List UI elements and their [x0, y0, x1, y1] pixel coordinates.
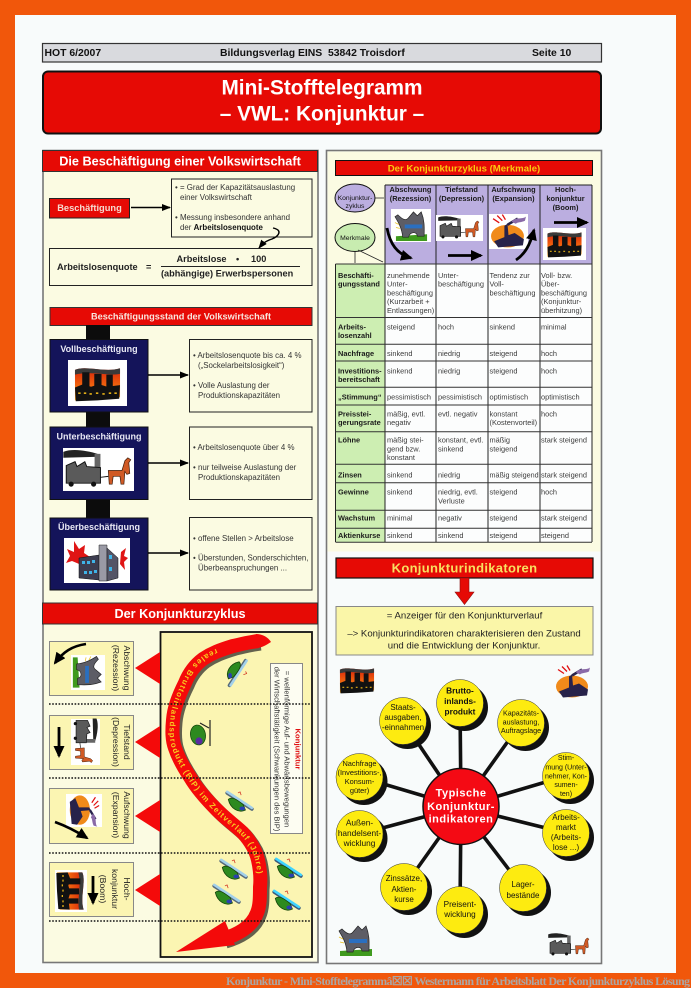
arrow: Aufschwung [516, 230, 534, 260]
label box: Beschäftigung [50, 198, 130, 218]
definition box [172, 179, 312, 237]
row: Zinsen [338, 470, 587, 479]
row: Beschäftigungsstand: gungsstand [338, 280, 380, 289]
title: – VWL: Konjunktur – [220, 102, 424, 126]
node: Kapazitätsauslastung: auslastung, [503, 718, 539, 726]
row: Stimmung [338, 392, 580, 401]
row: Löhne: stark steigend [541, 436, 587, 445]
icon: factory with donkey [74, 718, 98, 763]
card: Hochkonjunktur: (Boom) [98, 875, 108, 903]
row: Löhne: steigend [490, 444, 517, 453]
row: Wachstum [338, 514, 587, 523]
row: Stimmung: optimistisch [490, 392, 528, 401]
row: Nachfrage: niedrig [438, 349, 460, 358]
node: Nachfrage: (Investitions-, [338, 768, 381, 777]
row: Investitionsbereitschaft: hoch [541, 366, 557, 375]
table: Merkmale: Abschwung [390, 185, 432, 194]
row: Preissteigerungsrate [338, 410, 557, 427]
table: Merkmale: Hoch- [555, 185, 576, 194]
table header [385, 185, 592, 264]
block: Unterbeschäftigung: Unterbeschäftigung [56, 432, 142, 442]
node: Zinssätze: Aktien- [392, 885, 417, 894]
row: Wachstum: stark steigend [541, 514, 587, 523]
node: Arbeitsmarkt: Arbeits- [552, 813, 580, 822]
row: Zinsen: mäßig steigend [490, 470, 539, 479]
node: Zinssätze: kurse [394, 895, 414, 904]
definition box: indicators: –> Konjunkturindikatoren charakterisieren den Zustand [347, 628, 581, 640]
formula box: (abhängige) Erwerbspersonen [161, 268, 294, 278]
curve: real GDP [172, 641, 260, 939]
definition box: • = Grad der Kapazitätsauslastung [175, 183, 295, 192]
row: Löhne [338, 436, 587, 462]
row: Investitionsbereitschaft: bereitschaft [338, 375, 380, 384]
row: Preissteigerungsrate: (Kostenvorteil) [490, 418, 537, 427]
row: Beschäftigungsstand: beschäftigung [490, 288, 536, 297]
block: Vollbeschäftigung [50, 340, 148, 412]
curve shadow [175, 644, 263, 942]
heading: Der Konjunkturzyklus: Der Konjunkturzyklus [114, 607, 246, 621]
node: Arbeitsmarkt: (Arbeits- [551, 833, 581, 842]
block: Überbeschäftigung [50, 518, 148, 590]
arrow: peak [92, 876, 94, 903]
icon: boom factory small [340, 668, 374, 693]
icon: Aufschwung factory [489, 214, 528, 249]
row: Beschäftigungsstand: zunehmende [387, 271, 430, 280]
text box: Voll: • Arbeitslosenquote bis ca. 4 % [193, 351, 301, 360]
row: Stimmung: pessimistisch [387, 392, 431, 401]
row: Löhne: sinkend [438, 444, 463, 453]
heading: Beschäftigung: Die Beschäftigung einer Volkswirtschaft [59, 154, 302, 168]
helicopter [189, 720, 210, 746]
text box: Voll: („Sockelarbeitslosigkeit“) [198, 361, 285, 370]
row: Beschäftigungsstand: Tendenz zur [490, 271, 530, 280]
icon: declining factory bottom [339, 926, 372, 956]
node: Stimmung: sumen- [554, 782, 578, 789]
row: Beschäftigungsstand: Voll- [490, 280, 504, 289]
node: Lagerbestände: Lager- [511, 880, 535, 889]
node: Außenhandelsentwicklung [336, 810, 388, 862]
icon: rising factory [70, 795, 99, 827]
card: Tiefstand [50, 716, 134, 770]
card: Abschwung: (Rezession) [111, 645, 121, 691]
row: Arbeitslosenzahl: losenzahl [338, 331, 372, 340]
header bar: HOT 6/2007 [44, 48, 101, 59]
row: Wachstum: negativ [438, 514, 462, 523]
formula box: Arbeitslose [176, 254, 227, 264]
caption banner: Konjunktur - Mini-Stofftelegrammâ☒☒ Westermann für Arbeitsblatt Der Konjunkturzyklus Lösung [226, 974, 690, 988]
hub: Typische Konjunkturindikatoren: Konjunktur- [427, 801, 495, 813]
block: Unterbeschäftigung [50, 427, 148, 500]
icon: boom factory [56, 872, 84, 910]
row: Beschäftigungsstand: beschäftigung [438, 280, 484, 289]
panel: Die Beschäftigung einer Volkswirtschaft [42, 150, 318, 962]
table: Merkmale: Aufschwung [491, 185, 536, 194]
definition box: indicators [336, 606, 593, 655]
row: Beschäftigungsstand: überhitzung) [541, 306, 582, 315]
node: Staatsausgaben: ausgaben, [384, 713, 422, 722]
arrow: rising [55, 822, 87, 838]
node: Arbeitsmarkt: lose ...) [553, 843, 579, 852]
row: Investitionsbereitschaft [338, 366, 557, 384]
heading: Konjunkturindikatoren [336, 558, 593, 578]
row: Beschäftigungsstand: (Konjunktur- [541, 297, 582, 306]
arrow: down-curving [55, 644, 86, 663]
node: Bruttoinlandsprodukt [436, 680, 488, 731]
node: Nachfrage: güter) [350, 786, 369, 795]
row: Aktienkurse [338, 531, 569, 540]
icon: rising factory small [556, 666, 590, 698]
heading: Der Konjunkturzyklus [42, 603, 318, 624]
row: Gewinne: sinkend [387, 488, 412, 497]
card: Aufschwung: (Expansion) [111, 792, 121, 838]
formula box: • [236, 254, 239, 264]
text box: Unter [190, 427, 312, 500]
title: Mini-Stofftelegramm [221, 76, 423, 100]
icon: declining factory [73, 656, 101, 688]
subheading: Beschäftigungsstand [50, 308, 312, 326]
arrow: Über [148, 552, 188, 554]
row: Löhne: mäßig stei- [387, 436, 424, 445]
row: Arbeitslosenzahl: minimal [541, 322, 567, 331]
row: Investitionsbereitschaft: sinkend [387, 366, 412, 375]
node: Stimmung [542, 752, 594, 804]
header bar: Bildungsverlag EINS 53842 Troisdorf [220, 48, 405, 59]
row: Nachfrage: Nachfrage [338, 349, 374, 358]
definition box: der Arbeitslosenquote [180, 223, 263, 232]
hub: Typische Konjunkturindikatoren: Typische [436, 788, 486, 800]
arrow: Tiefstand [448, 254, 481, 257]
node: Außenhandelsentwicklung: wicklung [343, 838, 376, 848]
node: Arbeitsmarkt: markt [556, 823, 577, 832]
row: Wachstum: Wachstum [338, 514, 376, 523]
node: Kapazitätsauslastung [498, 700, 549, 751]
node: Bruttoinlandsprodukt: Brutto- [446, 686, 474, 696]
callout: Konjunktur [270, 664, 302, 834]
row: Arbeitslosenzahl: Arbeits- [338, 322, 366, 331]
row: Gewinne: steigend [490, 488, 517, 497]
row: Beschäftigungsstand [338, 271, 587, 315]
arrow: Hochkonjunktur [554, 221, 587, 224]
row: Gewinne: Gewinne [338, 488, 369, 497]
curve tail [256, 634, 271, 648]
arrowhead [176, 921, 235, 952]
node: Arbeitsmarkt [542, 810, 594, 861]
node: Nachfrage [336, 754, 388, 805]
node: Stimmung: ten) [560, 791, 572, 798]
card: Hochkonjunktur: Hoch- [122, 877, 132, 901]
arrow: Voll [148, 374, 188, 376]
row: Nachfrage [338, 349, 557, 358]
icon: Hochkonjunktur factory [543, 228, 586, 260]
table: Merkmale: konjunktur [546, 194, 585, 203]
subheading: Beschäftigungsstand: Beschäftigungsstand der Volkswirtschaft [91, 312, 271, 322]
oval: Merkmale: Merkmale [340, 235, 370, 242]
text box: Unter: Produktionskapazitäten [198, 473, 280, 482]
formula box: 100 [251, 254, 266, 264]
text box: Über: • offene Stellen > Arbeitslose [193, 534, 294, 543]
row: Nachfrage: steigend [490, 349, 517, 358]
row: Aktienkurse: sinkend [438, 531, 463, 540]
oval: Konjunkturzyklus: zyklus [346, 203, 365, 210]
formula box [50, 248, 312, 286]
header bar [42, 44, 602, 62]
card: Aufschwung: Aufschwung [122, 791, 132, 839]
row: Aktienkurse: steigend [541, 531, 569, 540]
table: Merkmale: (Boom) [553, 203, 579, 212]
row: Gewinne: Verluste [438, 497, 465, 506]
card: Hochkonjunktur [50, 862, 134, 916]
definition box: einer Volkswirtschaft [180, 193, 253, 202]
block: Vollbeschäftigung: Vollbeschäftigung [60, 344, 138, 354]
definition box: indicators: = Anzeiger für den Konjunkturverlauf [387, 610, 543, 622]
node: Kapazitätsauslastung: Auftragslage [501, 726, 541, 735]
formula box: Arbeitslosenquote [57, 262, 138, 272]
oval: Merkmale [335, 224, 375, 252]
row: Wachstum: steigend [490, 514, 517, 523]
header bar: Seite 10 [532, 48, 572, 59]
spokes [360, 703, 566, 910]
row: Preissteigerungsrate: mäßig, evtl. [387, 410, 425, 419]
text box: Unter: • Arbeitslosenquote über 4 % [193, 443, 294, 452]
row: Gewinne: hoch [541, 488, 557, 497]
card: Abschwung [50, 642, 134, 696]
icon: overheated building [66, 541, 128, 581]
dotted phase separators [49, 704, 310, 921]
row: Arbeitslosenzahl: hoch [438, 322, 454, 331]
node: Kapazitätsauslastung: Kapazitäts- [503, 708, 540, 718]
row: Preissteigerungsrate: evtl. negativ [438, 410, 478, 419]
row: Löhne: konstant, evtl. [438, 436, 484, 445]
row: Beschäftigungsstand: beschäftigung [541, 288, 587, 297]
row: Beschäftigungsstand: (Kurzarbeit + [387, 297, 430, 306]
table: Merkmale: Tiefstand [445, 185, 478, 194]
callout: Konjunktur: = wellenförmige Auf- und Abwärtsbewegungen [282, 671, 292, 827]
row: Zinsen: niedrig [438, 470, 460, 479]
node: Lagerbestände [500, 864, 551, 916]
row: Beschäftigungsstand: Über- [541, 280, 560, 289]
row: Preissteigerungsrate: negativ [387, 418, 411, 427]
row: Löhne: gend bzw. [387, 444, 420, 453]
node: Stimmung: nehmer, Kon- [545, 774, 588, 780]
table: Merkmale [336, 185, 592, 542]
pointer triangles [135, 652, 160, 906]
text box: Voll [190, 340, 312, 412]
row: Arbeitslosenzahl: sinkend [490, 322, 515, 331]
node: Nachfrage: Konsum- [345, 777, 375, 786]
node: Außenhandelsentwicklung: handelsent- [338, 828, 381, 838]
row: Arbeitslosenzahl [338, 322, 567, 340]
arrow: Unter [148, 462, 188, 464]
row: Investitionsbereitschaft: niedrig [438, 366, 460, 375]
row: Beschäftigungsstand: Beschäfti- [338, 271, 374, 280]
row: Zinsen: Zinsen [338, 470, 362, 479]
row: Beschäftigungsstand: Entlassungen) [387, 306, 434, 315]
title [43, 72, 601, 134]
node: Zinssätze: Zinssätze, [386, 874, 422, 883]
heading: Konjunkturindikatoren: Konjunkturindikatoren [392, 560, 537, 576]
arrow: to formula [259, 228, 279, 248]
arrow: to definition [131, 206, 170, 208]
table: Merkmale: (Depression) [439, 194, 485, 203]
card: Aufschwung [50, 788, 134, 844]
row: Preissteigerungsrate: hoch [541, 410, 557, 419]
plane 3 [227, 792, 252, 811]
text box: Über: Überbeanspruchungen ... [198, 564, 287, 572]
icon: factory with donkey [63, 450, 131, 487]
row: Nachfrage: hoch [541, 349, 557, 358]
row: Zinsen: stark steigend [541, 470, 587, 479]
text box: Unter: • nur teilweise Auslastung der [193, 463, 297, 472]
row: Beschäftigungsstand: Voll- bzw. [541, 271, 572, 280]
node: Zinssätze [380, 864, 432, 915]
row: Löhne: konstant [387, 453, 415, 462]
plane 6 [214, 885, 239, 904]
chart: Konjunkturzyklus wave [160, 631, 313, 958]
node: Bruttoinlandsprodukt: inlands- [444, 696, 476, 706]
node: Preisentwicklung: Preisent- [444, 900, 477, 909]
row: Aktienkurse: sinkend [387, 531, 412, 540]
oval: Konjunkturzyklus [335, 184, 375, 212]
node: Staatsausgaben: -einnahmen [382, 723, 424, 732]
definition box: indicators: und die Entwicklung der Konjunktur. [388, 640, 540, 652]
node: Lagerbestände: bestände [507, 891, 540, 900]
table: Merkmale: (Expansion) [492, 194, 535, 203]
arrow: red down [455, 578, 474, 604]
icon: Tiefstand factory [436, 215, 483, 241]
row: Preissteigerungsrate: gerungsrate [338, 418, 381, 427]
curve label: reales Bruttoinlandsprodukt (BIP) im Zeitverlauf (Jahre) [168, 649, 263, 874]
row: Beschäftigungsstand: Unter- [438, 271, 459, 280]
icon: factory with donkey bottom [548, 933, 589, 955]
row: Aktienkurse: steigend [490, 531, 517, 540]
arrow: level [58, 727, 60, 756]
card: Tiefstand: Tiefstand [122, 724, 132, 760]
row: Stimmung: pessimistisch [438, 392, 482, 401]
card: Tiefstand: (Depression) [111, 717, 121, 767]
node: Bruttoinlandsprodukt: produkt [445, 706, 476, 716]
plane 1 [227, 661, 247, 685]
row: Stimmung: „Stimmung“ [338, 392, 382, 401]
row: Gewinne: niedrig, evtl. [438, 488, 478, 497]
block: Überbeschäftigung: Überbeschäftigung [58, 522, 140, 532]
callout: Konjunktur: der Wirtschaftstätigkeit (Schwankungen des BIP) [272, 667, 282, 832]
node: Staatsausgaben [380, 698, 431, 749]
node: Preisentwicklung [436, 886, 488, 938]
arrow: Abschwung [387, 228, 411, 258]
heading: Merkmale [336, 160, 592, 176]
label box: Beschäftigung: Beschäftigung [57, 203, 122, 213]
node: Preisentwicklung: wicklung [443, 910, 476, 919]
row: Löhne: mäßig [490, 436, 510, 445]
node: Stimmung: mung (Unter- [545, 764, 587, 772]
row: Beschäftigungsstand: Unter- [387, 280, 408, 289]
row: Stimmung: optimistisch [541, 392, 580, 401]
text box: Voll: Produktionskapazitäten [198, 391, 280, 400]
row: Löhne: Löhne [338, 436, 360, 445]
row: Gewinne [338, 488, 557, 506]
formula box: = [146, 262, 151, 272]
row: Preissteigerungsrate: konstant [490, 410, 517, 419]
row: Preissteigerungsrate: Preisstei- [338, 410, 372, 419]
text box: Voll: • Volle Auslastung der [193, 381, 270, 390]
row: Investitionsbereitschaft: steigend [490, 366, 517, 375]
panel: right column [326, 150, 602, 964]
connector column [86, 325, 110, 520]
oval: Konjunkturzyklus: Konjunktur- [338, 195, 372, 202]
node: Stimmung: Stim- [558, 755, 575, 762]
plane 4 [221, 860, 246, 879]
node: Staatsausgaben: Staats- [390, 703, 416, 712]
heading: Beschäftigung [42, 150, 318, 172]
node: Nachfrage: Nachfrage [342, 759, 377, 768]
card: Hochkonjunktur: konjunktur [110, 869, 120, 909]
plane 5 [276, 859, 301, 878]
row: Investitionsbereitschaft: Investitions- [338, 366, 382, 375]
diagram: indicators hub [336, 680, 594, 938]
callout: Konjunktur: Konjunktur [294, 728, 302, 770]
plane 7 [274, 891, 299, 910]
row: Aktienkurse: Aktienkurse [338, 531, 380, 540]
cream upper background [328, 152, 600, 552]
row: Nachfrage: sinkend [387, 349, 412, 358]
text box: Über [190, 518, 312, 590]
pointers from ovals [355, 198, 384, 263]
definition box: • Messung insbesondere anhand [175, 213, 290, 222]
icon: boom factory [75, 368, 120, 401]
table: Merkmale: (Rezession) [390, 194, 432, 203]
text box: Über: • Überstunden, Sonderschichten, [193, 554, 308, 562]
card: Abschwung: Abschwung [122, 646, 132, 691]
hub: Typische Konjunkturindikatoren [423, 768, 499, 844]
row: Wachstum: minimal [387, 514, 413, 523]
node: Außenhandelsentwicklung: Außen- [346, 818, 373, 828]
hub: Typische Konjunkturindikatoren: indikatoren [429, 814, 493, 826]
row: Zinsen: sinkend [387, 470, 412, 479]
row: Arbeitslosenzahl: steigend [387, 322, 415, 331]
heading: Merkmale: Der Konjunkturzyklus (Merkmale) [388, 164, 540, 174]
icon: Abschwung factory [391, 209, 431, 242]
row: Beschäftigungsstand: beschäftigung [387, 288, 433, 297]
